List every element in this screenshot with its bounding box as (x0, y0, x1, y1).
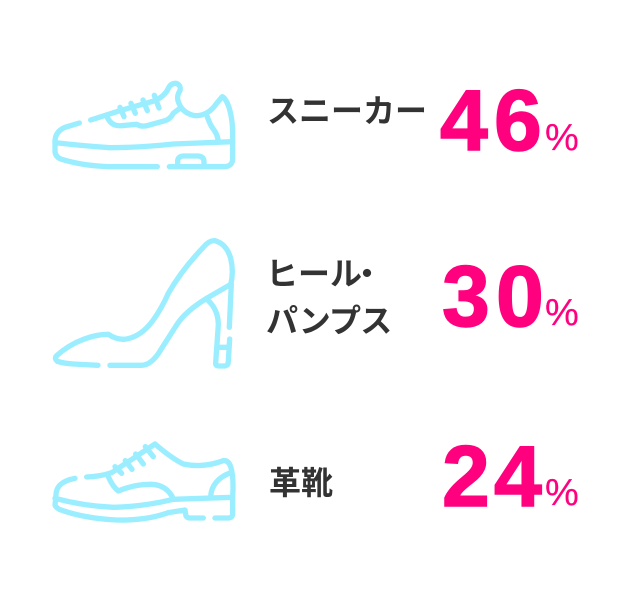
value: sneakers 46%: % (545, 117, 579, 159)
label: heels and pumps: ・ (351, 249, 383, 295)
value: heels and pumps 30% (442, 249, 579, 345)
icon: high heel pump (55, 241, 232, 366)
label: sneakers: スニーカー (267, 86, 427, 132)
value: heels and pumps 30%: % (545, 292, 579, 334)
label: heels and pumps: パンプス (266, 296, 391, 342)
label: heels and pumps: ヒール (266, 249, 362, 295)
value: leather shoes 24%: 2 (442, 429, 490, 525)
value: leather shoes 24%: 4 (494, 429, 542, 525)
value: sneakers 46%: 6 (494, 73, 542, 169)
value: sneakers 46%: 4 (440, 73, 488, 169)
icon: sneaker (55, 83, 233, 167)
value: sneakers 46% (440, 73, 579, 169)
value: leather shoes 24% (442, 429, 579, 525)
value: heels and pumps 30%: 0 (496, 249, 544, 345)
value: leather shoes 24%: % (545, 472, 579, 514)
label: heels and pumps (266, 249, 391, 342)
value: heels and pumps 30%: 3 (442, 249, 490, 345)
label: leather shoes: 革靴 (269, 458, 333, 504)
icon: leather shoe (55, 444, 233, 520)
